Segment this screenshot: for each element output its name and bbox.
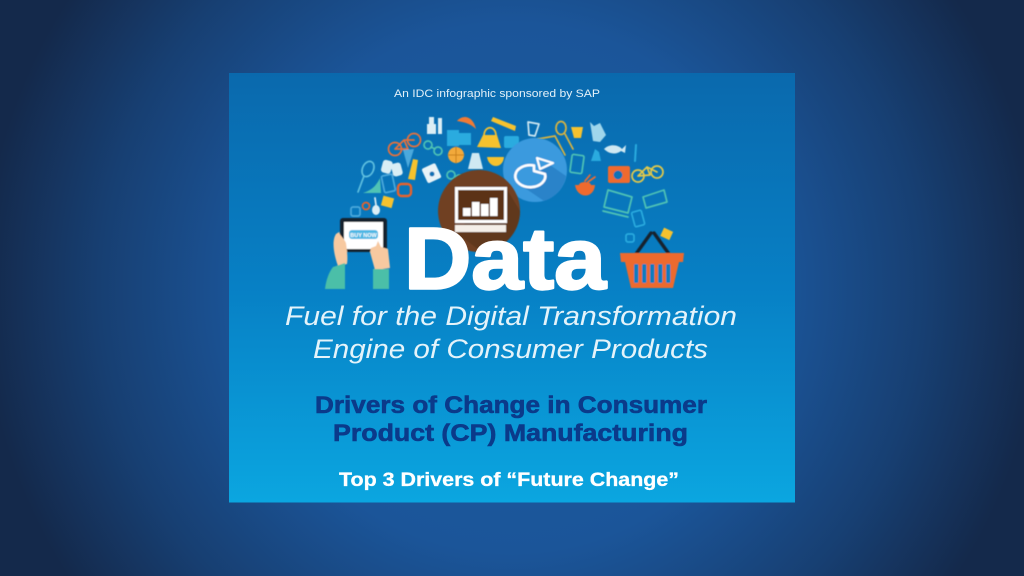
icon: noodle bowl	[575, 175, 595, 196]
icon: bag small	[351, 207, 360, 216]
icon: fish	[604, 145, 626, 153]
icon: hands with tablet	[325, 218, 390, 289]
icon: phone	[381, 174, 396, 193]
title: Data: Data	[404, 210, 607, 308]
icon: toy right	[660, 228, 673, 240]
icon: shopping bags	[447, 130, 471, 146]
icon: bar chart laptop circle	[438, 170, 520, 252]
icon: guitar	[375, 198, 376, 205]
icon: shoe	[363, 178, 381, 193]
icon: flashlight	[491, 117, 516, 131]
icon: dress	[468, 153, 483, 169]
heading: drivers of change	[315, 392, 707, 447]
icon: basketball	[448, 147, 464, 163]
subheading: top 3 drivers: Top 3 Drivers of “Future Change”	[339, 470, 679, 491]
icon: toy	[381, 196, 394, 208]
icon: small bag	[626, 234, 634, 242]
icon: tank top	[590, 122, 606, 142]
icon arc: consumer products	[351, 117, 673, 242]
icon: croissant	[457, 117, 476, 129]
sponsor line: An IDC infographic sponsored by SAP	[394, 88, 600, 100]
icon: monitor	[643, 190, 667, 208]
icon: bowl	[487, 157, 504, 166]
icon: iron	[591, 149, 601, 161]
subtitle: Fuel for the Digital Transformation	[285, 301, 737, 331]
icon: sunglasses	[447, 171, 462, 181]
heading: drivers of change: Drivers of Change in Consumer	[315, 392, 707, 419]
icon: laptop	[603, 190, 632, 217]
icon: racket	[358, 159, 376, 192]
icon: nail polish	[427, 117, 442, 134]
panel: infographic	[229, 73, 795, 502]
icon: camera blue	[504, 136, 519, 148]
icon: tube	[635, 145, 636, 161]
subtitle	[285, 301, 737, 364]
icon: bicycle yellow	[632, 166, 663, 182]
icon: hands with tablet: BUY NOW	[350, 233, 378, 239]
icon: tennis racket	[538, 122, 573, 155]
icon: tablet	[631, 210, 645, 227]
icon: yellow handbag	[477, 128, 501, 148]
icon: phone right	[570, 154, 584, 174]
icon: lipstick	[408, 159, 418, 180]
icon: ring	[362, 202, 370, 210]
icon: camera white	[421, 163, 442, 184]
icon: handbag	[398, 184, 411, 196]
subtitle: Engine of Consumer Products	[313, 334, 708, 364]
icon: shopping basket	[620, 233, 684, 288]
icon: ice cream	[403, 149, 414, 168]
icon: cupcake	[571, 127, 583, 138]
icon: bicycle orange	[388, 134, 420, 156]
icon: pie chart circle	[503, 138, 567, 202]
heading: drivers of change: Product (CP) Manufacturing	[333, 420, 688, 447]
icon: cup	[528, 122, 539, 136]
icon: glasses	[424, 141, 442, 155]
icon: camera orange	[608, 166, 630, 183]
icon: gloves	[380, 159, 403, 177]
